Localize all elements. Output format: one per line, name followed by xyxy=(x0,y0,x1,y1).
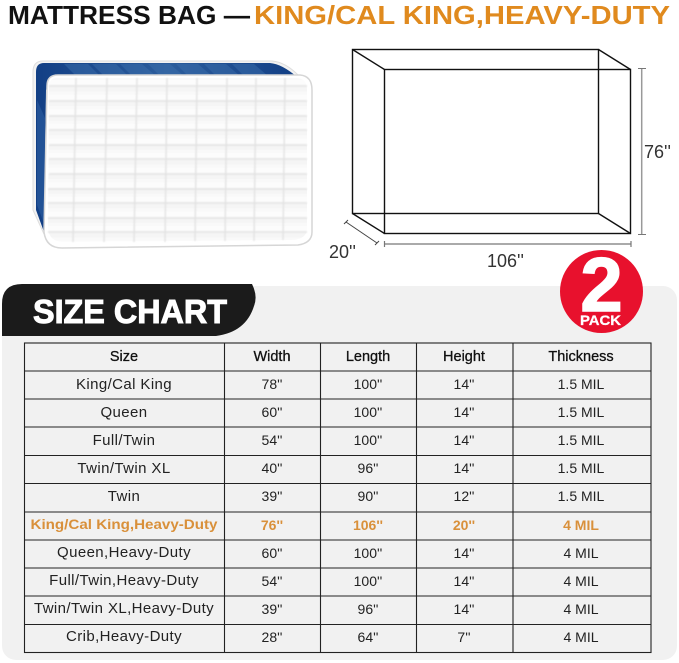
mattress illustration xyxy=(33,61,312,248)
row: King/Cal King xyxy=(76,376,605,393)
row: King/Cal King Heavy-Duty (highlighted): 76'' xyxy=(261,517,283,533)
row: Crib Heavy-Duty: 28'' xyxy=(262,629,282,645)
row: Queen Heavy-Duty: 14'' xyxy=(454,545,474,561)
row: King/Cal King: 14'' xyxy=(454,376,474,392)
row: King/Cal King: 78'' xyxy=(262,376,282,392)
row: Queen Heavy-Duty: Queen,Heavy-Duty xyxy=(57,544,191,561)
heading tab: size chart xyxy=(2,284,256,336)
row: Queen Heavy-Duty: 100'' xyxy=(354,545,382,561)
row: King/Cal King Heavy-Duty (highlighted): King/Cal King,Heavy-Duty xyxy=(30,516,218,532)
dimension label: 20 inches: 20'' xyxy=(329,242,356,262)
table header: Height xyxy=(443,349,485,365)
row: Twin/Twin XL Heavy-Duty: 4 MIL xyxy=(563,601,599,617)
row: Twin/Twin XL Heavy-Duty: 39'' xyxy=(262,601,282,617)
row: Queen: 60'' xyxy=(262,404,282,420)
dimension label: 76 inches: 76'' xyxy=(644,142,671,162)
row: Queen Heavy-Duty: 60'' xyxy=(262,545,282,561)
row: Full/Twin Heavy-Duty: 4 MIL xyxy=(563,573,599,589)
table header: Size xyxy=(110,349,138,365)
row: Queen: 100'' xyxy=(354,404,382,420)
title: MATTRESS BAG — xyxy=(8,0,250,30)
blue quilting stripes xyxy=(64,64,268,76)
row: Full/Twin: 14'' xyxy=(454,432,474,448)
badge: 2 pack: 2 xyxy=(580,243,623,328)
row: Full/Twin: 1.5 MIL xyxy=(558,432,605,448)
row: Crib Heavy-Duty: Crib,Heavy-Duty xyxy=(66,628,182,645)
row: Full/Twin: Full/Twin xyxy=(93,432,155,449)
row: King/Cal King Heavy-Duty (highlighted) xyxy=(30,516,599,533)
row: Full/Twin Heavy-Duty xyxy=(49,572,599,589)
row: Queen: 14'' xyxy=(454,404,474,420)
row: Queen: Queen xyxy=(100,404,148,421)
heading tab: size chart: SIZE CHART xyxy=(33,294,228,331)
row: Full/Twin: 54'' xyxy=(262,432,282,448)
row: Twin/Twin XL: Twin/Twin XL xyxy=(77,460,171,477)
row: King/Cal King: 1.5 MIL xyxy=(558,376,605,392)
row: Twin/Twin XL Heavy-Duty: Twin/Twin XL,Heavy-Duty xyxy=(34,600,214,617)
row: Twin: 90'' xyxy=(358,488,378,504)
size chart table xyxy=(24,343,651,652)
row: Full/Twin xyxy=(93,432,605,449)
row: Crib Heavy-Duty: 4 MIL xyxy=(563,629,599,645)
row: Twin: 12'' xyxy=(454,488,474,504)
row: Twin/Twin XL xyxy=(77,460,605,477)
row: Twin xyxy=(108,488,605,505)
panel: size chart background xyxy=(2,286,677,660)
row: Full/Twin Heavy-Duty: Full/Twin,Heavy-Duty xyxy=(49,572,199,589)
row: Queen Heavy-Duty: 4 MIL xyxy=(563,545,599,561)
row: Queen: 1.5 MIL xyxy=(558,404,605,420)
row: King/Cal King Heavy-Duty (highlighted): 20'' xyxy=(453,517,475,533)
row: Crib Heavy-Duty xyxy=(66,628,599,645)
row: Queen Heavy-Duty xyxy=(57,544,599,561)
row: Twin/Twin XL Heavy-Duty xyxy=(34,600,599,617)
row: Twin: Twin xyxy=(108,488,140,505)
bag dimension diagram xyxy=(329,50,671,271)
row: King/Cal King: 100'' xyxy=(354,376,382,392)
title xyxy=(8,0,670,30)
table header: Length xyxy=(346,349,390,365)
row: Twin/Twin XL Heavy-Duty: 14'' xyxy=(454,601,474,617)
row: Twin: 39'' xyxy=(262,488,282,504)
row: King/Cal King Heavy-Duty (highlighted): 106'' xyxy=(353,517,383,533)
table header: Width xyxy=(253,349,291,365)
row: Twin/Twin XL Heavy-Duty: 96'' xyxy=(358,601,378,617)
row: Full/Twin Heavy-Duty: 54'' xyxy=(262,573,282,589)
row: Twin/Twin XL: 1.5 MIL xyxy=(558,460,605,476)
badge: 2 pack: PACK xyxy=(580,312,621,328)
row: Twin/Twin XL: 14'' xyxy=(454,460,474,476)
row: Twin: 1.5 MIL xyxy=(558,488,605,504)
table header: Thickness xyxy=(548,349,614,365)
dimension label: 106 inches: 106'' xyxy=(487,251,524,271)
row: Queen xyxy=(100,404,605,421)
row: King/Cal King: King/Cal King xyxy=(76,376,172,393)
table header xyxy=(110,349,614,365)
row: Full/Twin Heavy-Duty: 14'' xyxy=(454,573,474,589)
title: KING/CAL KING,HEAVY-DUTY xyxy=(254,0,670,30)
row: Crib Heavy-Duty: 7'' xyxy=(457,629,471,645)
row: Crib Heavy-Duty: 64'' xyxy=(358,629,378,645)
row: Full/Twin: 100'' xyxy=(354,432,382,448)
row: Twin/Twin XL: 96'' xyxy=(358,460,378,476)
row: Full/Twin Heavy-Duty: 100'' xyxy=(354,573,382,589)
row: King/Cal King Heavy-Duty (highlighted): 4 MIL xyxy=(563,517,599,533)
badge: 2 pack xyxy=(560,243,643,333)
row: Twin/Twin XL: 40'' xyxy=(262,460,282,476)
